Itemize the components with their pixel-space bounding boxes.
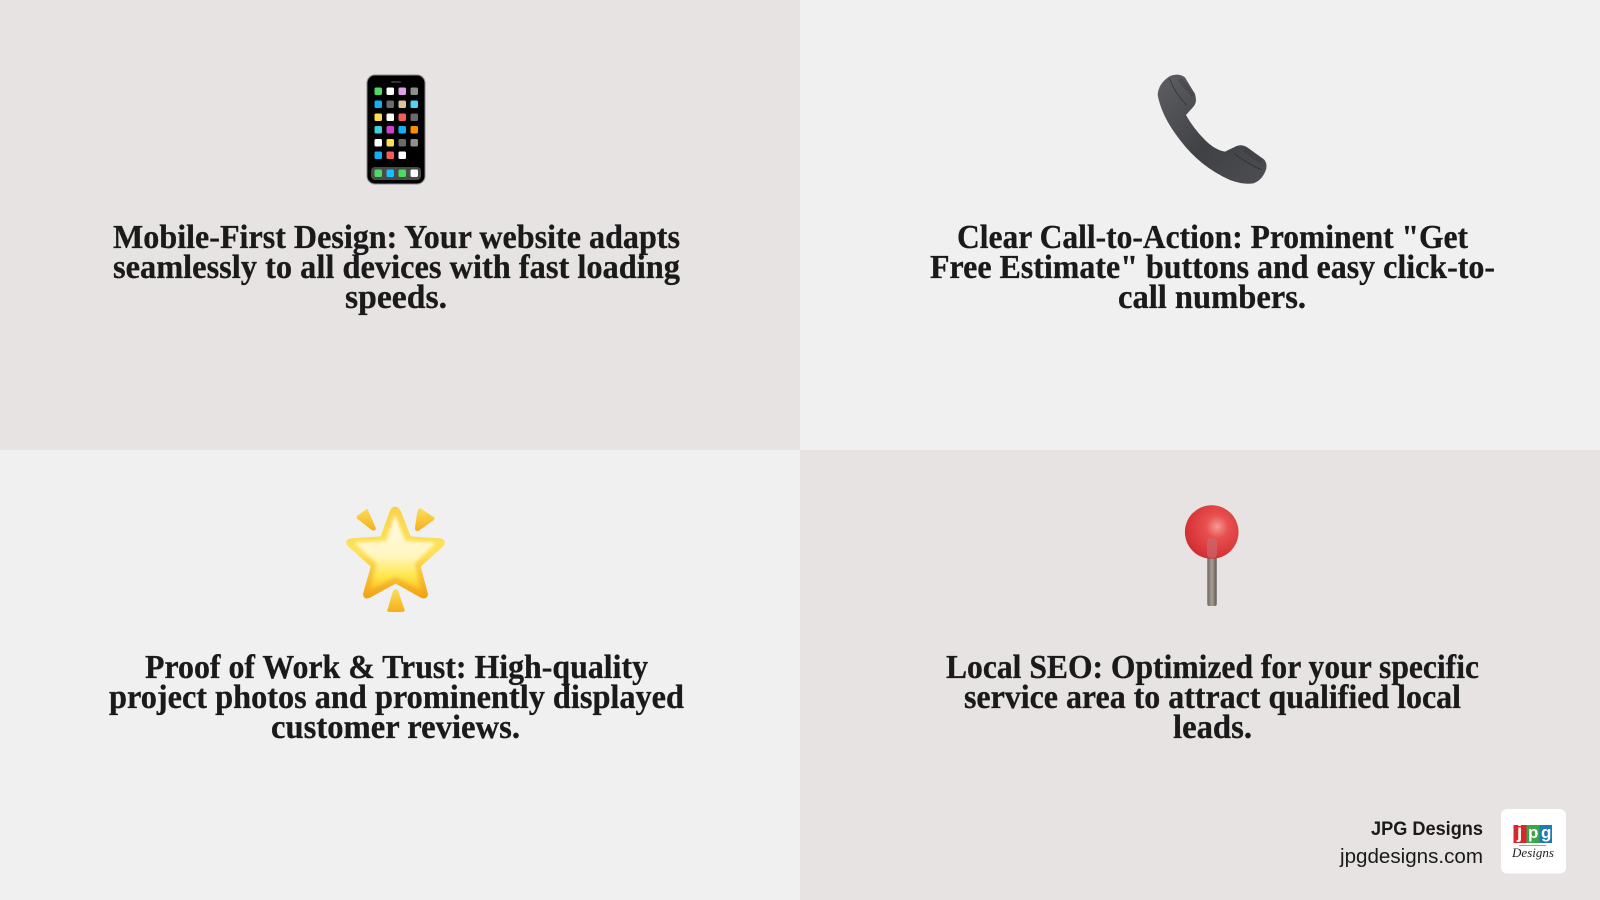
icon: mobile phone xyxy=(367,75,425,184)
logo: JPG Designs xyxy=(1501,809,1566,874)
heading: local SEO xyxy=(946,649,1479,746)
logo: JPG Designs: Designs xyxy=(1511,845,1554,860)
heading: mobile-first design: seamlessly to all devices with fast loading xyxy=(113,249,680,286)
heading: clear call-to-action: Clear Call-to-Action: Prominent "Get xyxy=(957,219,1469,256)
icon: glowing star xyxy=(346,507,445,612)
logo: JPG Designs: j xyxy=(1516,822,1522,843)
icon: round pushpin xyxy=(1185,505,1238,606)
panel: clear call-to-action xyxy=(800,0,1600,450)
heading: clear call-to-action: call numbers. xyxy=(1118,279,1306,316)
heading: proof of work and trust: Proof of Work & Trust: High-quality xyxy=(145,649,648,686)
panel: mobile-first design xyxy=(0,0,800,450)
logo: JPG Designs: g xyxy=(1541,823,1551,842)
logo: JPG Designs: p xyxy=(1528,823,1538,842)
heading: local SEO: service area to attract qualified local xyxy=(964,679,1461,716)
heading: local SEO: Local SEO: Optimized for your specific xyxy=(946,649,1479,686)
panel: proof of work and trust xyxy=(0,450,800,900)
panel: local SEO xyxy=(800,450,1600,900)
heading: mobile-first design xyxy=(113,219,680,316)
brand name and website: JPG Designs xyxy=(1371,819,1483,840)
heading: local SEO: leads. xyxy=(1173,709,1252,746)
heading: proof of work and trust: project photos and prominently displayed xyxy=(109,679,684,716)
heading: clear call-to-action xyxy=(930,219,1495,316)
heading: mobile-first design: Mobile-First Design: Your website adapts xyxy=(113,219,680,256)
brand name and website xyxy=(1339,819,1483,868)
heading: mobile-first design: speeds. xyxy=(345,279,447,316)
brand name and website: jpgdesigns.com xyxy=(1339,846,1483,868)
heading: proof of work and trust: customer reviews. xyxy=(271,709,520,746)
icon: telephone receiver xyxy=(1158,75,1267,184)
heading: clear call-to-action: Free Estimate" buttons and easy click-to- xyxy=(930,249,1495,286)
heading: proof of work and trust xyxy=(109,649,684,746)
